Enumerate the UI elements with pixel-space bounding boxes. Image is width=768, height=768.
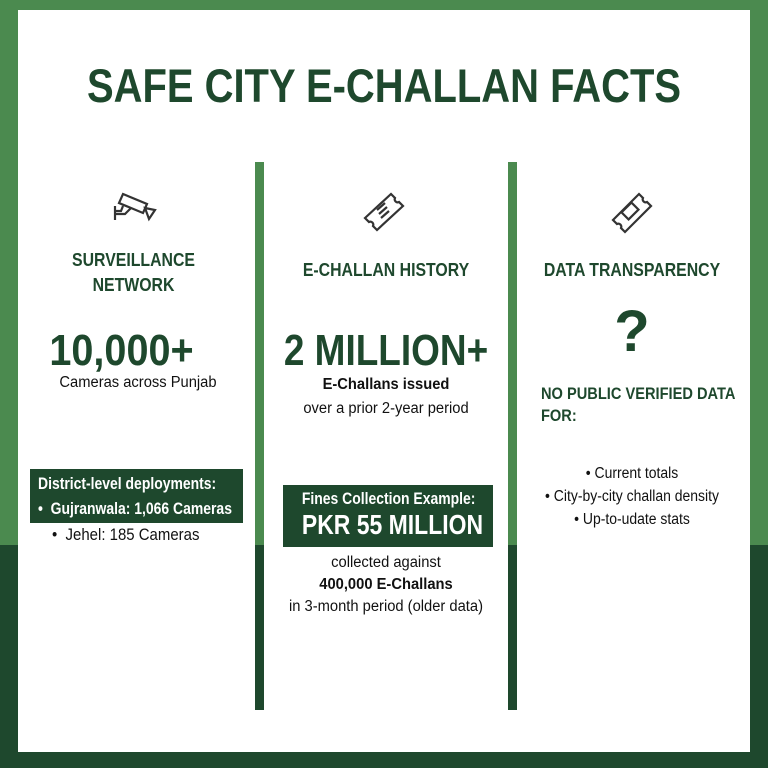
title: SAFE CITY E-CHALLAN FACTS <box>87 59 681 112</box>
text: jehel: • Jehel: 185 Cameras <box>52 525 199 544</box>
heading: SURVEILLANCE <box>72 250 195 270</box>
icon: camera <box>114 192 157 222</box>
callout: fines <box>283 485 493 547</box>
list: • Up-to-udate stats <box>574 511 690 528</box>
text: fines detail: collected against <box>331 554 441 571</box>
icon: ticket <box>364 192 404 232</box>
caption: E-Challans issued <box>323 376 449 393</box>
icon: ticket <box>612 192 652 234</box>
heading: E-CHALLAN HISTORY <box>303 260 469 280</box>
stat: 2 MILLION+ <box>284 326 488 375</box>
callout: fines: PKR 55 MILLION <box>302 509 483 540</box>
text: no data <box>541 384 735 425</box>
text: fines detail <box>289 554 483 615</box>
callout: district deployments <box>30 469 243 523</box>
heading: DATA TRANSPARENCY <box>544 260 720 280</box>
heading <box>72 250 195 295</box>
list <box>545 465 719 528</box>
caption: over a prior 2-year period <box>303 400 469 417</box>
text: no data: FOR: <box>541 406 577 425</box>
panel: history <box>284 192 488 417</box>
callout: district deployments: • Gujranwala: 1,066 Cameras <box>38 499 232 518</box>
heading: NETWORK <box>93 275 174 295</box>
callout: district deployments: District-level deployments: <box>38 474 216 493</box>
caption: Cameras across Punjab <box>59 374 217 391</box>
list: • City-by-city challan density <box>545 488 719 505</box>
stat: 10,000+ <box>49 326 194 375</box>
list: • Current totals <box>586 465 678 482</box>
text: fines detail: 400,000 E-Challans <box>319 576 453 593</box>
text: no data: NO PUBLIC VERIFIED DATA <box>541 384 735 403</box>
text: fines detail: in 3-month period (older data) <box>289 598 483 615</box>
callout: fines: Fines Collection Example: <box>302 489 475 508</box>
caption <box>303 376 469 417</box>
panel: surveillance <box>49 192 217 391</box>
icon: question mark: ? <box>614 299 650 364</box>
panel: transparency <box>541 192 735 528</box>
